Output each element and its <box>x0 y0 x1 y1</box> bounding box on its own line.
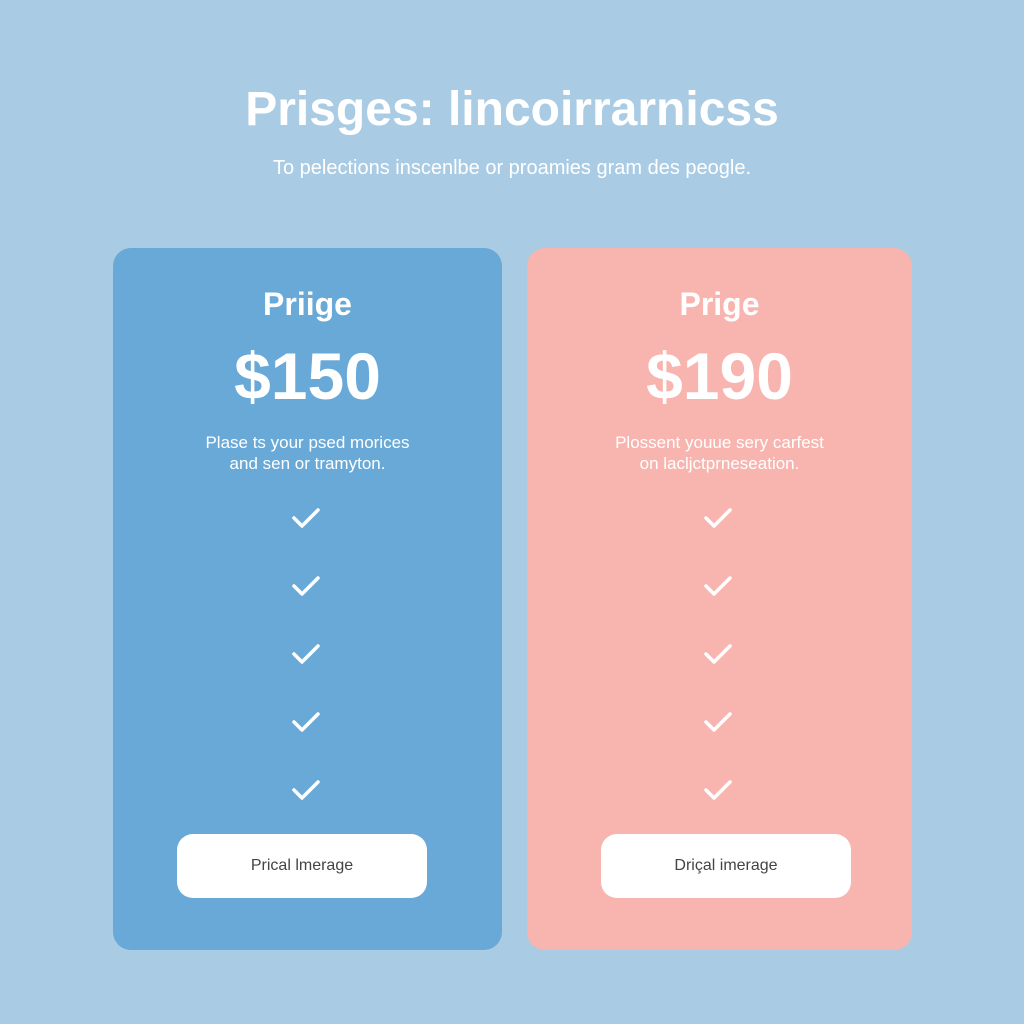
price: $190 <box>646 339 793 413</box>
description <box>205 433 410 473</box>
button <box>601 834 851 898</box>
plan name: Priige <box>263 286 352 322</box>
description: and sen or tramyton. <box>230 454 385 473</box>
button: Prical lmerage <box>251 857 353 874</box>
price: $150 <box>234 339 381 413</box>
description <box>615 433 824 473</box>
button <box>177 834 427 898</box>
description: Plase ts your psed morices <box>205 433 410 452</box>
button: Driçal imerage <box>674 857 778 874</box>
plan name: Prige <box>679 286 760 322</box>
subtitle: To pelections inscenlbe or proamies gram des peogle. <box>273 157 751 179</box>
description: on lacljctprneseation. <box>640 454 799 473</box>
checklist <box>292 508 320 800</box>
panel: blue plan <box>113 248 502 950</box>
description: Plossent youue sery carfest <box>615 433 824 452</box>
checklist <box>704 508 732 800</box>
title: Prisges: lincoirrarnicss <box>245 83 779 136</box>
panel: pink plan <box>527 248 912 950</box>
